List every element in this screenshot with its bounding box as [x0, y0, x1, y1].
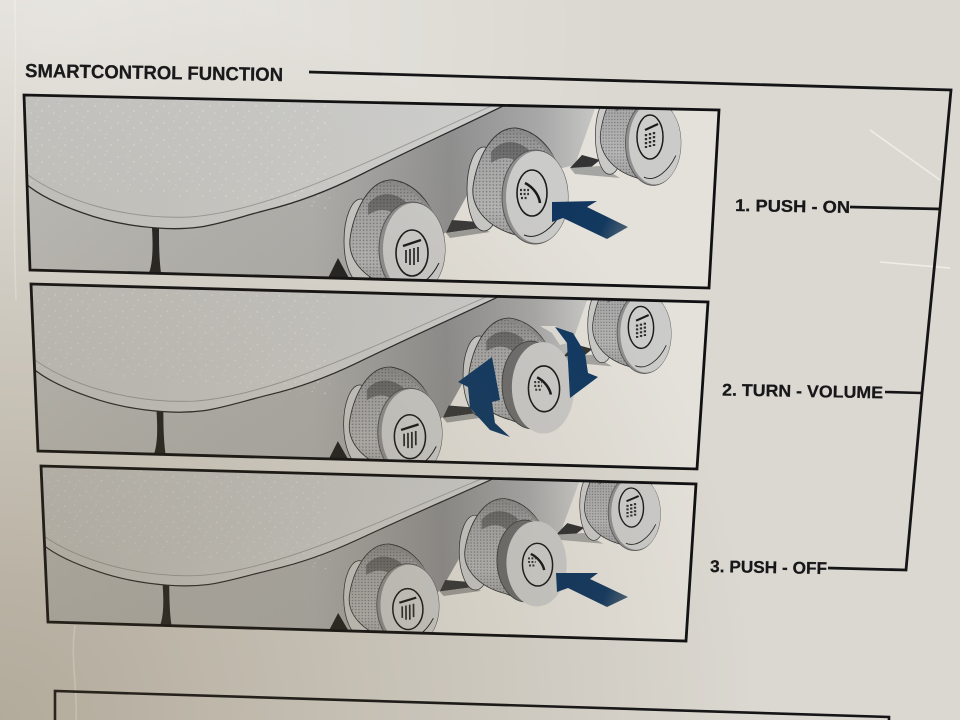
center knob released [459, 498, 567, 607]
panel 2: turn volume [30, 282, 710, 470]
title: SMARTCONTROL FUNCTION [25, 61, 283, 86]
label: turn volume: 2. TURN - VOLUME [722, 381, 883, 402]
bracket connector [309, 72, 951, 570]
arrow: turn right [555, 327, 598, 398]
center knob pulled out [463, 318, 575, 434]
label: push off: 3. PUSH - OFF [710, 557, 827, 578]
panel 1: push on [22, 94, 720, 290]
arrow: turn left [458, 357, 510, 437]
light crescent behind turn arrow [540, 326, 567, 345]
label: push on: 1. PUSH - ON [735, 196, 850, 217]
center knob pressed [467, 128, 568, 244]
next panel outline [55, 691, 889, 720]
panel 3: push off [40, 464, 698, 642]
arrow: push off [556, 573, 628, 607]
arrow: push in [552, 201, 628, 239]
